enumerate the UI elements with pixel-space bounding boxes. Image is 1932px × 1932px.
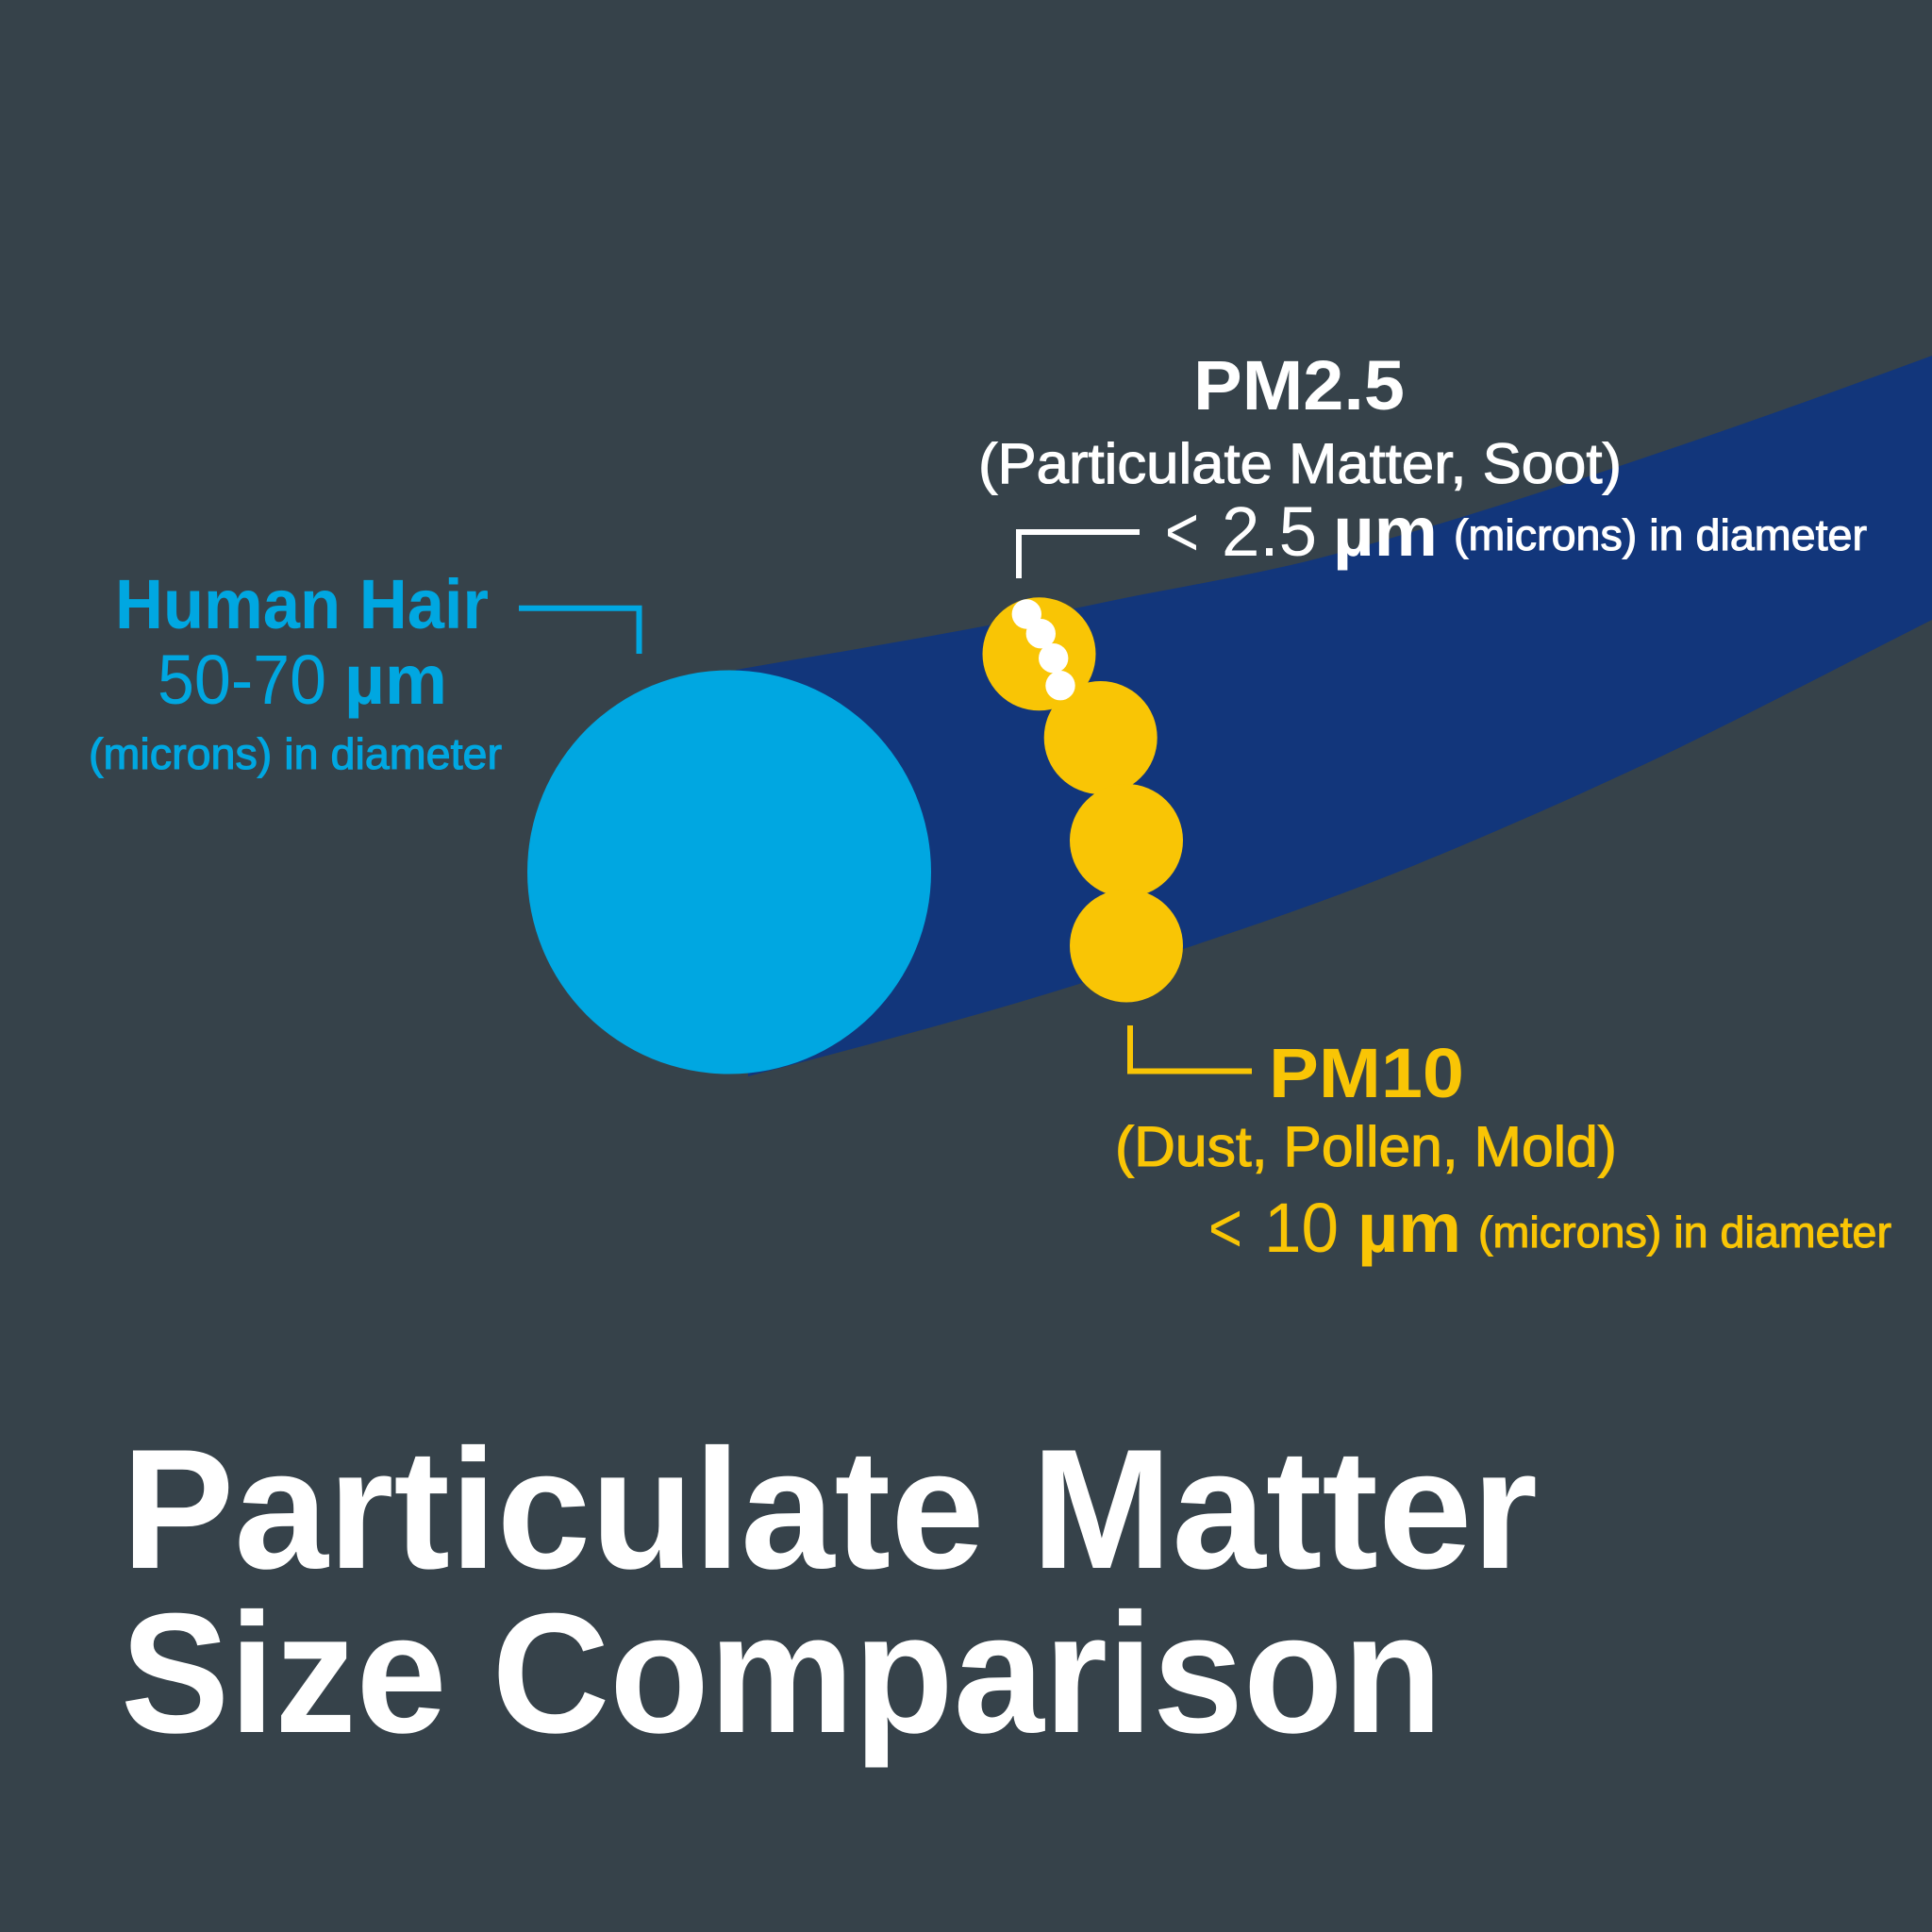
particles: PM2.5 xyxy=(1012,599,1075,700)
connector: human hair xyxy=(519,608,640,654)
title: Particulate Matter xyxy=(122,1414,1538,1605)
label: PM10: (Dust, Pollen, Mold) xyxy=(1115,1115,1617,1178)
label: PM2.5: < xyxy=(1165,492,1199,571)
label: human hair xyxy=(89,565,502,778)
label: PM2.5: µm xyxy=(1333,492,1438,571)
circle: human hair xyxy=(527,670,931,1074)
title: Size Comparison xyxy=(121,1578,1442,1769)
label: human hair: 50-70 xyxy=(158,641,326,719)
diagram: hair band xyxy=(736,356,1932,1076)
label: PM10 xyxy=(1115,1034,1891,1267)
label: PM10: 10 xyxy=(1264,1189,1339,1267)
connector: PM2.5 xyxy=(1019,532,1140,578)
particles: PM10 xyxy=(983,597,1183,1002)
label: PM2.5 xyxy=(978,346,1867,571)
label: PM10: µm xyxy=(1357,1189,1461,1267)
label: PM2.5: 2.5 xyxy=(1222,492,1317,571)
label: PM2.5: (microns) in diameter xyxy=(1454,510,1867,559)
label: PM10: PM10 xyxy=(1269,1034,1464,1112)
label: PM10: (microns) in diameter xyxy=(1478,1208,1891,1257)
label: PM2.5: PM2.5 xyxy=(1193,346,1405,425)
connector: PM10 xyxy=(1130,1025,1252,1072)
label: PM2.5: (Particulate Matter, Soot) xyxy=(978,432,1622,495)
label: human hair: µm xyxy=(344,641,447,719)
label: human hair: Human Hair xyxy=(115,565,489,643)
label: human hair: (microns) in diameter xyxy=(89,729,502,778)
label: PM10: < xyxy=(1208,1189,1242,1267)
title xyxy=(121,1414,1538,1769)
